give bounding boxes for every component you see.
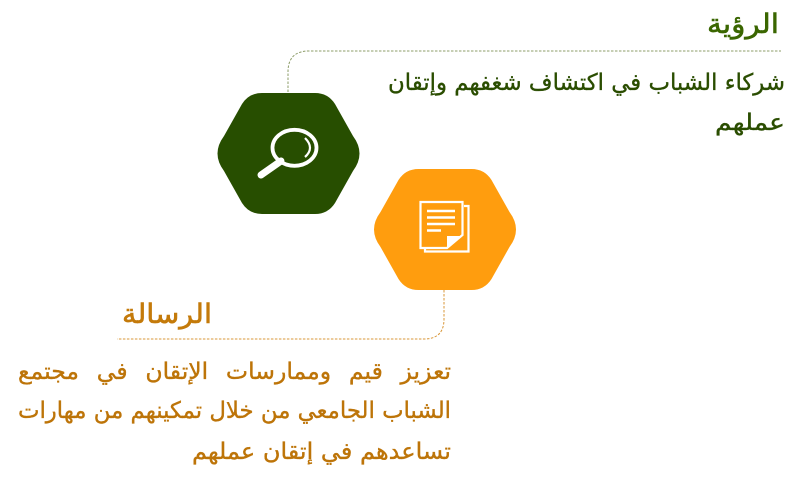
text: vision body bbox=[388, 70, 785, 136]
icon: magnifier bbox=[261, 130, 316, 175]
heading: vision: الرؤية bbox=[707, 9, 779, 40]
text: vision body: عملهم bbox=[715, 110, 785, 136]
text: mission body: الشباب الجامعي من خلال تمكينهم من مهارات bbox=[18, 398, 451, 424]
hexagon: mission with document icon bbox=[374, 169, 516, 290]
connector: mission dashed line bbox=[117, 290, 444, 339]
heading: mission: الرسالة bbox=[122, 299, 212, 330]
text: mission body: تعزيز قيم وممارسات الإتقان في مجتمع bbox=[18, 359, 451, 385]
connector: vision dashed line bbox=[288, 51, 781, 92]
icon: documents bbox=[420, 202, 468, 252]
hexagon: vision with magnifier icon bbox=[218, 93, 360, 214]
text: mission body bbox=[18, 359, 451, 465]
text: vision body: شركاء الشباب في اكتشاف شغفهم وإتقان bbox=[388, 70, 785, 96]
text: mission body: تساعدهم في إتقان عملهم bbox=[192, 439, 451, 465]
